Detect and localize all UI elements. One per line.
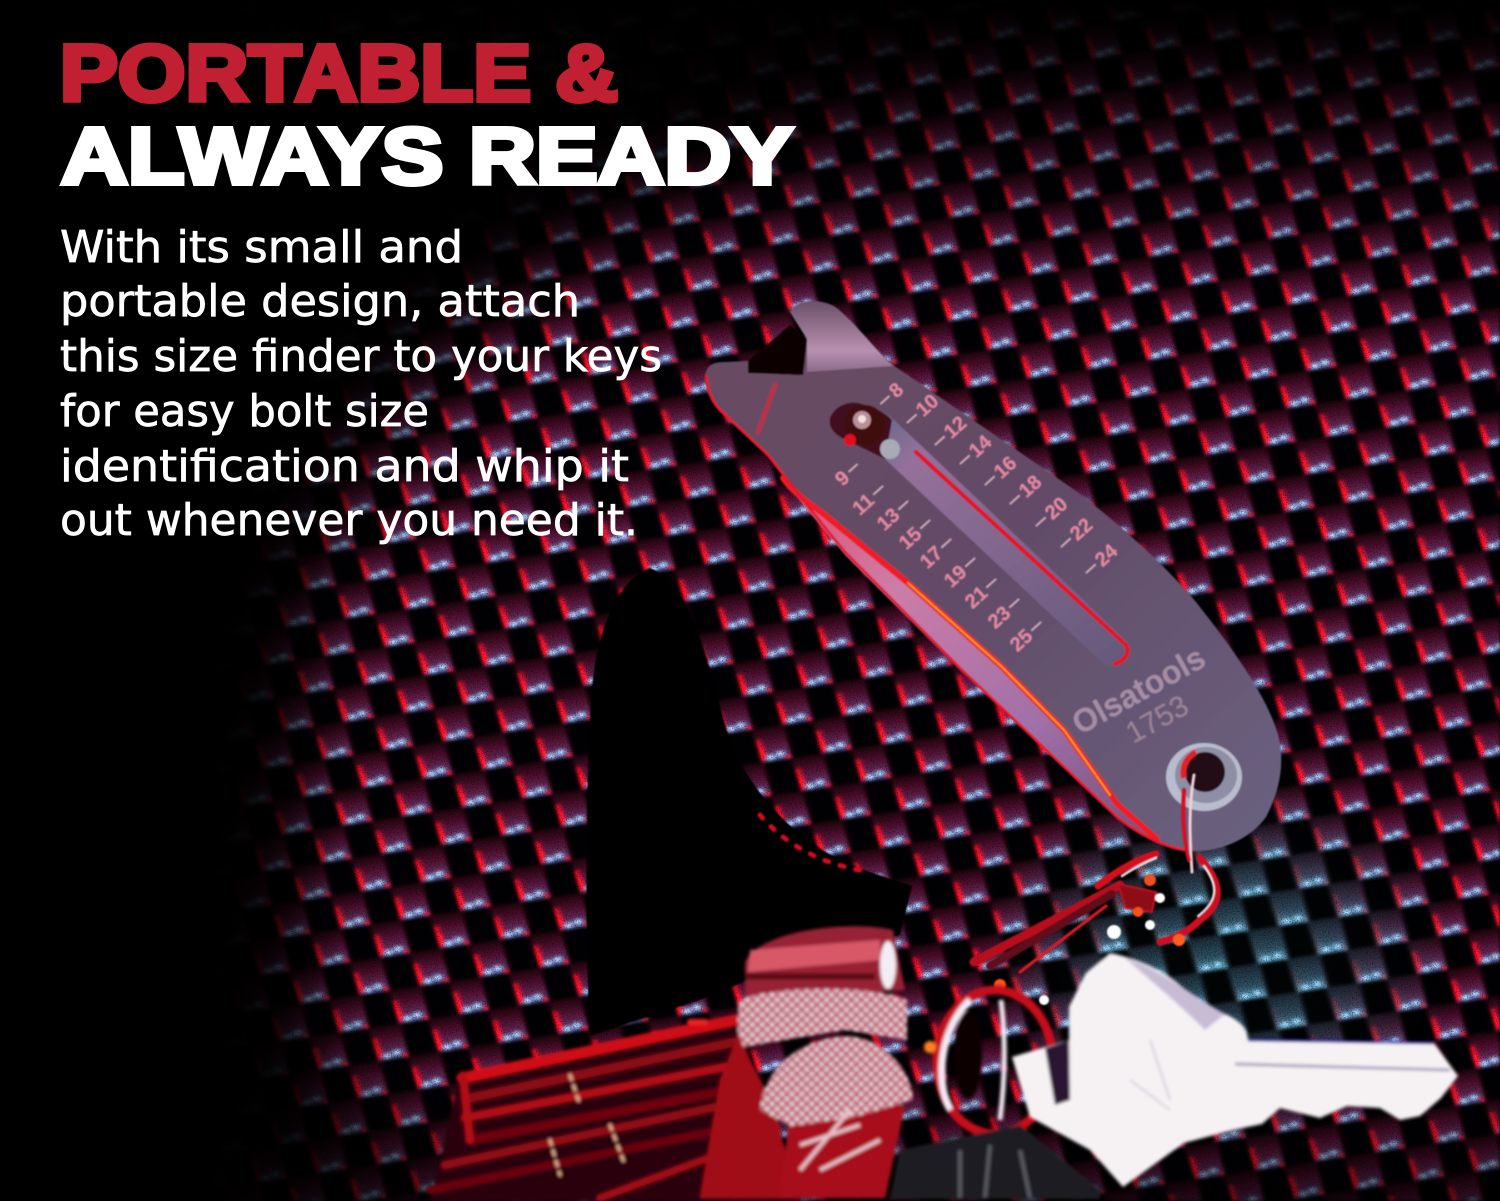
body paragraph: portable design, attach [60, 276, 580, 327]
even scale numbers: 10 [912, 390, 943, 421]
opener notch [748, 325, 807, 375]
odd scale numbers [831, 457, 1049, 656]
odd scale numbers: 15 [895, 523, 926, 554]
odd scale numbers: 9 [831, 467, 854, 491]
slot [830, 403, 1128, 667]
keyhole gap [1045, 1040, 1070, 1105]
fabric fade into darkness at the left [0, 0, 980, 1201]
odd scale numbers: 17 [916, 542, 947, 573]
slot red reflection [916, 452, 1128, 664]
even scale numbers: 12 [940, 412, 971, 443]
body paragraph: out whenever you need it. [60, 495, 638, 546]
key scuffs [1130, 1040, 1170, 1110]
bottle opener top highlight [790, 301, 893, 372]
tassel dark red mass [430, 1020, 800, 1201]
charm barrel [745, 926, 905, 1002]
heading line 1: PORTABLE & [60, 28, 618, 118]
key blade top shadow [1248, 1040, 1434, 1043]
odd scale numbers: 19 [940, 561, 971, 592]
heading [60, 28, 793, 200]
body paragraph: this size finder to your keys [60, 331, 662, 382]
heading line 2: ALWAYS READY [61, 112, 793, 200]
even scale numbers: 24 [1091, 540, 1123, 571]
even scale numbers: 8 [885, 379, 908, 403]
engraved model number: 1753 [1121, 689, 1194, 750]
eyelet hole [1166, 743, 1242, 811]
fabric dims toward the bottom [0, 1080, 1500, 1201]
tassel and keychain charm [430, 926, 1100, 1201]
even scale numbers: 14 [965, 431, 997, 462]
engraved brand name: Olsatools [1066, 638, 1211, 742]
tool body [705, 301, 1281, 851]
dark left edge [0, 0, 340, 1201]
key blade groove [1235, 1064, 1450, 1070]
body paragraph: identification and whip it [60, 441, 629, 492]
tassel strands [430, 1020, 735, 1198]
even scale numbers: 18 [1015, 471, 1046, 502]
odd scale numbers: 23 [984, 602, 1015, 633]
red tassel mass below the disc [700, 1035, 800, 1198]
body paragraph [60, 222, 662, 546]
key head shading [1125, 958, 1225, 1030]
odd scale numbers: 13 [873, 504, 904, 535]
slider ball [844, 405, 900, 459]
even scale numbers: 20 [1041, 493, 1072, 524]
split ring and clasp [974, 775, 1217, 1005]
even scale numbers: 22 [1066, 514, 1097, 545]
even scale numbers [874, 379, 1123, 582]
size finder tool [705, 301, 1281, 851]
even scale numbers: 16 [990, 452, 1021, 483]
lower bevel [775, 470, 1184, 850]
mesh disc [760, 1036, 913, 1126]
dark silhouette shape [586, 568, 912, 1036]
house key [1012, 953, 1458, 1187]
body paragraph: With its small and [60, 222, 463, 273]
metal ring [924, 990, 1053, 1134]
charm mesh [738, 989, 907, 1048]
fabric fade at the top [0, 0, 1500, 300]
body paragraph: for easy bolt size [60, 386, 429, 437]
odd scale numbers: 11 [848, 489, 879, 520]
odd scale numbers: 21 [961, 582, 992, 613]
red edge reflections [706, 376, 1184, 850]
odd scale numbers: 25 [1006, 625, 1037, 656]
dark metal under the key [890, 1125, 1100, 1199]
